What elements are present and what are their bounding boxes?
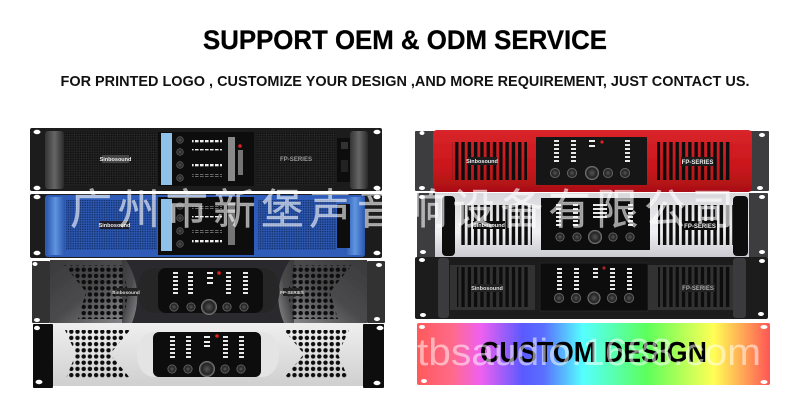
amplifier: silver louvred — [417, 193, 768, 258]
amplifier: dark grey perforated: Sinbosound — [112, 290, 140, 296]
amplifier: silver perforated — [33, 323, 384, 388]
amplifier: silver louvred: FP-SERIES — [684, 224, 716, 230]
custom design label: CUSTOM DESIGN — [480, 337, 707, 369]
amplifier: black FP-series mesh: Sinbosound — [100, 157, 131, 163]
amplifier: red louvred: FP-SERIES — [682, 160, 713, 166]
amplifier: red louvred: Sinbosound — [466, 159, 498, 165]
title: SUPPORT OEM & ODM SERVICE — [203, 25, 607, 55]
amplifier: black louvred: FP-SERIES — [682, 286, 714, 292]
amplifier: red louvred — [415, 130, 769, 192]
amplifier: dark grey perforated — [32, 260, 385, 323]
amplifier: black louvred: Sinbosound — [471, 286, 503, 292]
amplifier: blue FP-series mesh — [30, 194, 382, 258]
amplifier: dark grey perforated: FP-SERIES — [280, 290, 304, 295]
watermark: company name: 广州市新堡声音响设备有限公司 — [70, 186, 734, 233]
amplifier: black louvred — [415, 257, 768, 319]
watermark: web address: tbsaudio.1688.com — [417, 332, 761, 374]
amplifier: black FP-series mesh: FP-SERIES — [280, 157, 312, 163]
amplifier: black FP-series mesh — [30, 128, 382, 191]
amplifier: silver louvred: Sinbosound — [473, 223, 505, 229]
rainbow custom design faceplate — [417, 323, 770, 385]
subtitle: FOR PRINTED LOGO , CUSTOMIZE YOUR DESIGN ,AND MORE REQUIREMENT, JUST CONTACT US. — [60, 73, 750, 90]
amplifier: blue FP-series mesh: Sinbosound — [99, 223, 130, 229]
